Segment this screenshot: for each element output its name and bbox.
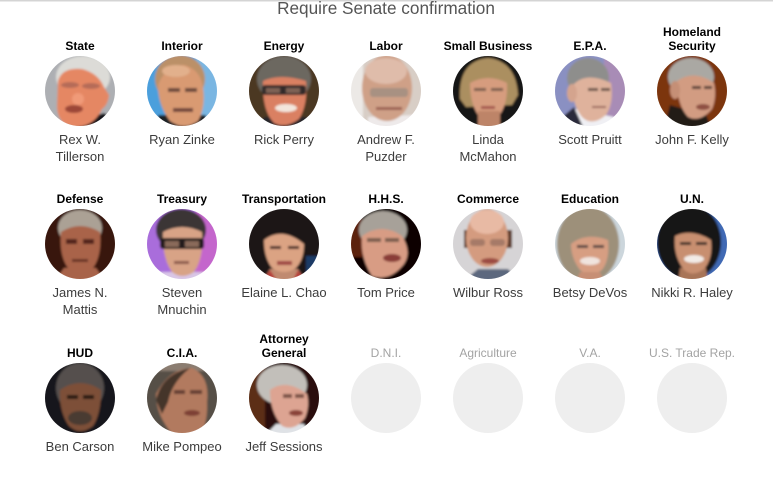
card: Defense, James N. Mattis: Defense	[57, 192, 104, 206]
card: Education, Betsy DeVos	[554, 194, 627, 300]
card: V.A., vacant: V.A.	[579, 346, 601, 360]
portrait: McMahon	[453, 56, 523, 126]
card: U.N., Nikki R. Haley: U.N.	[680, 192, 704, 206]
card: Transportation, Elaine L. Chao: Elaine L. Chao	[241, 285, 327, 300]
card: Small Business, Linda McMahon: Linda	[472, 132, 505, 147]
card: Defense, James N. Mattis: Mattis	[63, 302, 98, 317]
card: Transportation, Elaine L. Chao	[241, 192, 327, 300]
card: Homeland Security, John F. Kelly: John F. Kelly	[655, 132, 729, 147]
card: Treasury, Steven Mnuchin: Treasury	[157, 192, 207, 206]
portrait: Mnuchin	[147, 209, 217, 279]
portrait: Perry	[249, 56, 319, 126]
card: H.H.S., Tom Price: Tom Price	[357, 285, 415, 300]
portrait: Puzder	[351, 56, 421, 126]
portrait: Zinke	[147, 56, 217, 126]
card: D.N.I., vacant: D.N.I.	[371, 346, 401, 360]
card: U.S. Trade Rep., vacant	[649, 346, 735, 433]
card: Labor, Andrew F. Puzder: Andrew F.	[357, 132, 415, 147]
card: Attorney General, Jeff Sessions: Jeff Sessions	[245, 439, 323, 454]
card: Energy, Rick Perry	[249, 42, 319, 146]
card: Treasury, Steven Mnuchin: Steven	[162, 285, 202, 300]
card: HUD, Ben Carson: HUD	[67, 346, 93, 360]
placeholder circle	[657, 363, 727, 433]
card: Homeland Security, John F. Kelly	[652, 25, 732, 147]
portrait: Carson	[45, 363, 115, 433]
card: Commerce, Wilbur Ross: Wilbur Ross	[453, 285, 524, 300]
card: Small Business, Linda McMahon: Small Business	[444, 39, 533, 53]
placeholder circle	[555, 363, 625, 433]
card: Agriculture, vacant: Agriculture	[459, 346, 517, 360]
card: Energy, Rick Perry: Energy	[264, 39, 305, 53]
card: Energy, Rick Perry: Rick Perry	[254, 132, 314, 147]
card: V.A., vacant	[555, 346, 625, 433]
card: H.H.S., Tom Price	[351, 194, 421, 297]
card: Homeland Security, John F. Kelly: Security	[668, 39, 716, 53]
card: U.N., Nikki R. Haley	[651, 192, 733, 300]
card: Labor, Andrew F. Puzder	[351, 41, 421, 161]
card: C.I.A., Mike Pompeo: Mike Pompeo	[142, 439, 222, 454]
card: E.P.A., Scott Pruitt: E.P.A.	[573, 39, 607, 53]
placeholder circle	[453, 363, 523, 433]
card: Attorney General, Jeff Sessions: Attorney	[259, 332, 309, 346]
card: HUD, Ben Carson	[45, 348, 115, 451]
portrait: Pompeo	[147, 363, 217, 433]
card: State, Rex W. Tillerson: Rex W.	[59, 132, 101, 147]
card: Homeland Security, John F. Kelly: Homeland	[663, 25, 721, 39]
portrait: Tillerson	[45, 56, 115, 126]
card: Commerce, Wilbur Ross	[453, 194, 523, 297]
card: D.N.I., vacant	[351, 346, 421, 433]
card: Treasury, Steven Mnuchin: Mnuchin	[157, 302, 207, 317]
card: C.I.A., Mike Pompeo	[142, 346, 222, 454]
card: Attorney General, Jeff Sessions	[244, 332, 324, 454]
card: State, Rex W. Tillerson	[45, 42, 115, 161]
card: E.P.A., Scott Pruitt	[555, 42, 625, 144]
portrait: Mattis	[45, 209, 115, 279]
portrait: Kelly	[657, 56, 727, 126]
card: Agriculture, vacant	[453, 346, 523, 433]
card: Education, Betsy DeVos: Education	[561, 192, 619, 206]
card: State, Rex W. Tillerson: State	[65, 39, 95, 53]
portrait: Ross	[453, 209, 523, 279]
card: Interior, Ryan Zinke: Interior	[161, 39, 203, 53]
portrait: Chao	[249, 209, 319, 279]
portrait: Pruitt	[555, 56, 625, 126]
card: Small Business, Linda McMahon: McMahon	[459, 149, 517, 164]
placeholder circle	[351, 363, 421, 433]
card: Interior, Ryan Zinke	[147, 41, 217, 146]
card: Attorney General, Jeff Sessions: General	[262, 346, 306, 360]
card: U.N., Nikki R. Haley: Nikki R. Haley	[651, 285, 733, 300]
portrait: Haley	[657, 209, 727, 279]
card: Transportation, Elaine L. Chao: Transportation	[242, 192, 326, 206]
card: H.H.S., Tom Price: H.H.S.	[368, 192, 404, 206]
card: E.P.A., Scott Pruitt: Scott Pruitt	[558, 132, 622, 147]
card: Education, Betsy DeVos: Betsy DeVos	[553, 285, 628, 300]
card: Commerce, Wilbur Ross: Commerce	[457, 192, 519, 206]
card: U.S. Trade Rep., vacant: U.S. Trade Rep.	[649, 346, 735, 360]
card: State, Rex W. Tillerson: Tillerson	[56, 149, 104, 164]
card: Defense, James N. Mattis	[45, 194, 115, 314]
card: Treasury, Steven Mnuchin	[147, 194, 217, 314]
card: Interior, Ryan Zinke: Ryan Zinke	[149, 132, 215, 147]
card: C.I.A., Mike Pompeo: C.I.A.	[167, 346, 197, 360]
card: Defense, James N. Mattis: James N.	[53, 285, 107, 300]
card: Labor, Andrew F. Puzder: Puzder	[365, 149, 407, 164]
portrait: Price	[351, 209, 421, 279]
portrait: DeVos	[555, 209, 625, 279]
card: Small Business, Linda McMahon	[444, 39, 533, 164]
card: HUD, Ben Carson: Ben Carson	[46, 439, 114, 454]
portrait: Sessions	[249, 363, 319, 433]
card: Labor, Andrew F. Puzder: Labor	[369, 39, 403, 53]
